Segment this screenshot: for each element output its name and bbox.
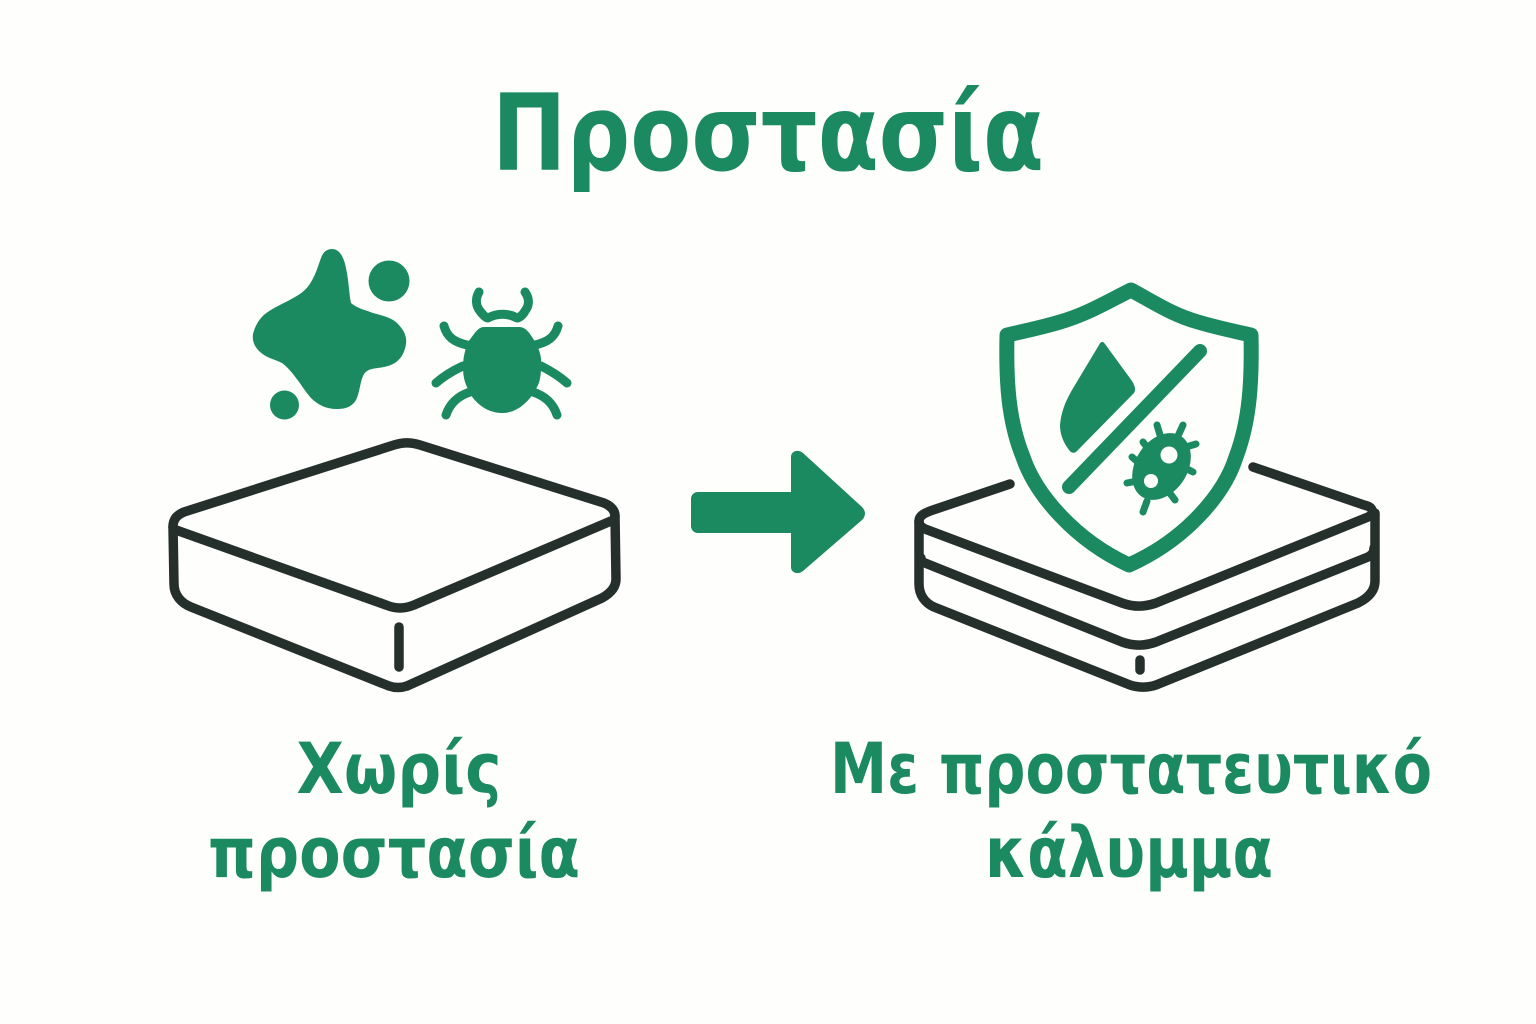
label: without protection: προστασία	[208, 812, 580, 894]
icon: germ	[1120, 422, 1203, 512]
icon: stain	[253, 249, 410, 420]
icon: crossed drop	[1060, 342, 1135, 453]
right mattress	[919, 467, 1375, 687]
slash	[1069, 351, 1200, 487]
left mattress	[173, 443, 616, 688]
label: with protective cover: κάλυμμα	[985, 812, 1273, 894]
icon: bug	[436, 292, 567, 415]
arrow	[691, 451, 865, 573]
label: with protective cover	[830, 728, 1432, 894]
label: without protection	[208, 728, 580, 894]
icon: shield	[1007, 290, 1251, 565]
title: Προστασία	[492, 72, 1044, 195]
label: without protection: Χωρίς	[296, 728, 502, 810]
